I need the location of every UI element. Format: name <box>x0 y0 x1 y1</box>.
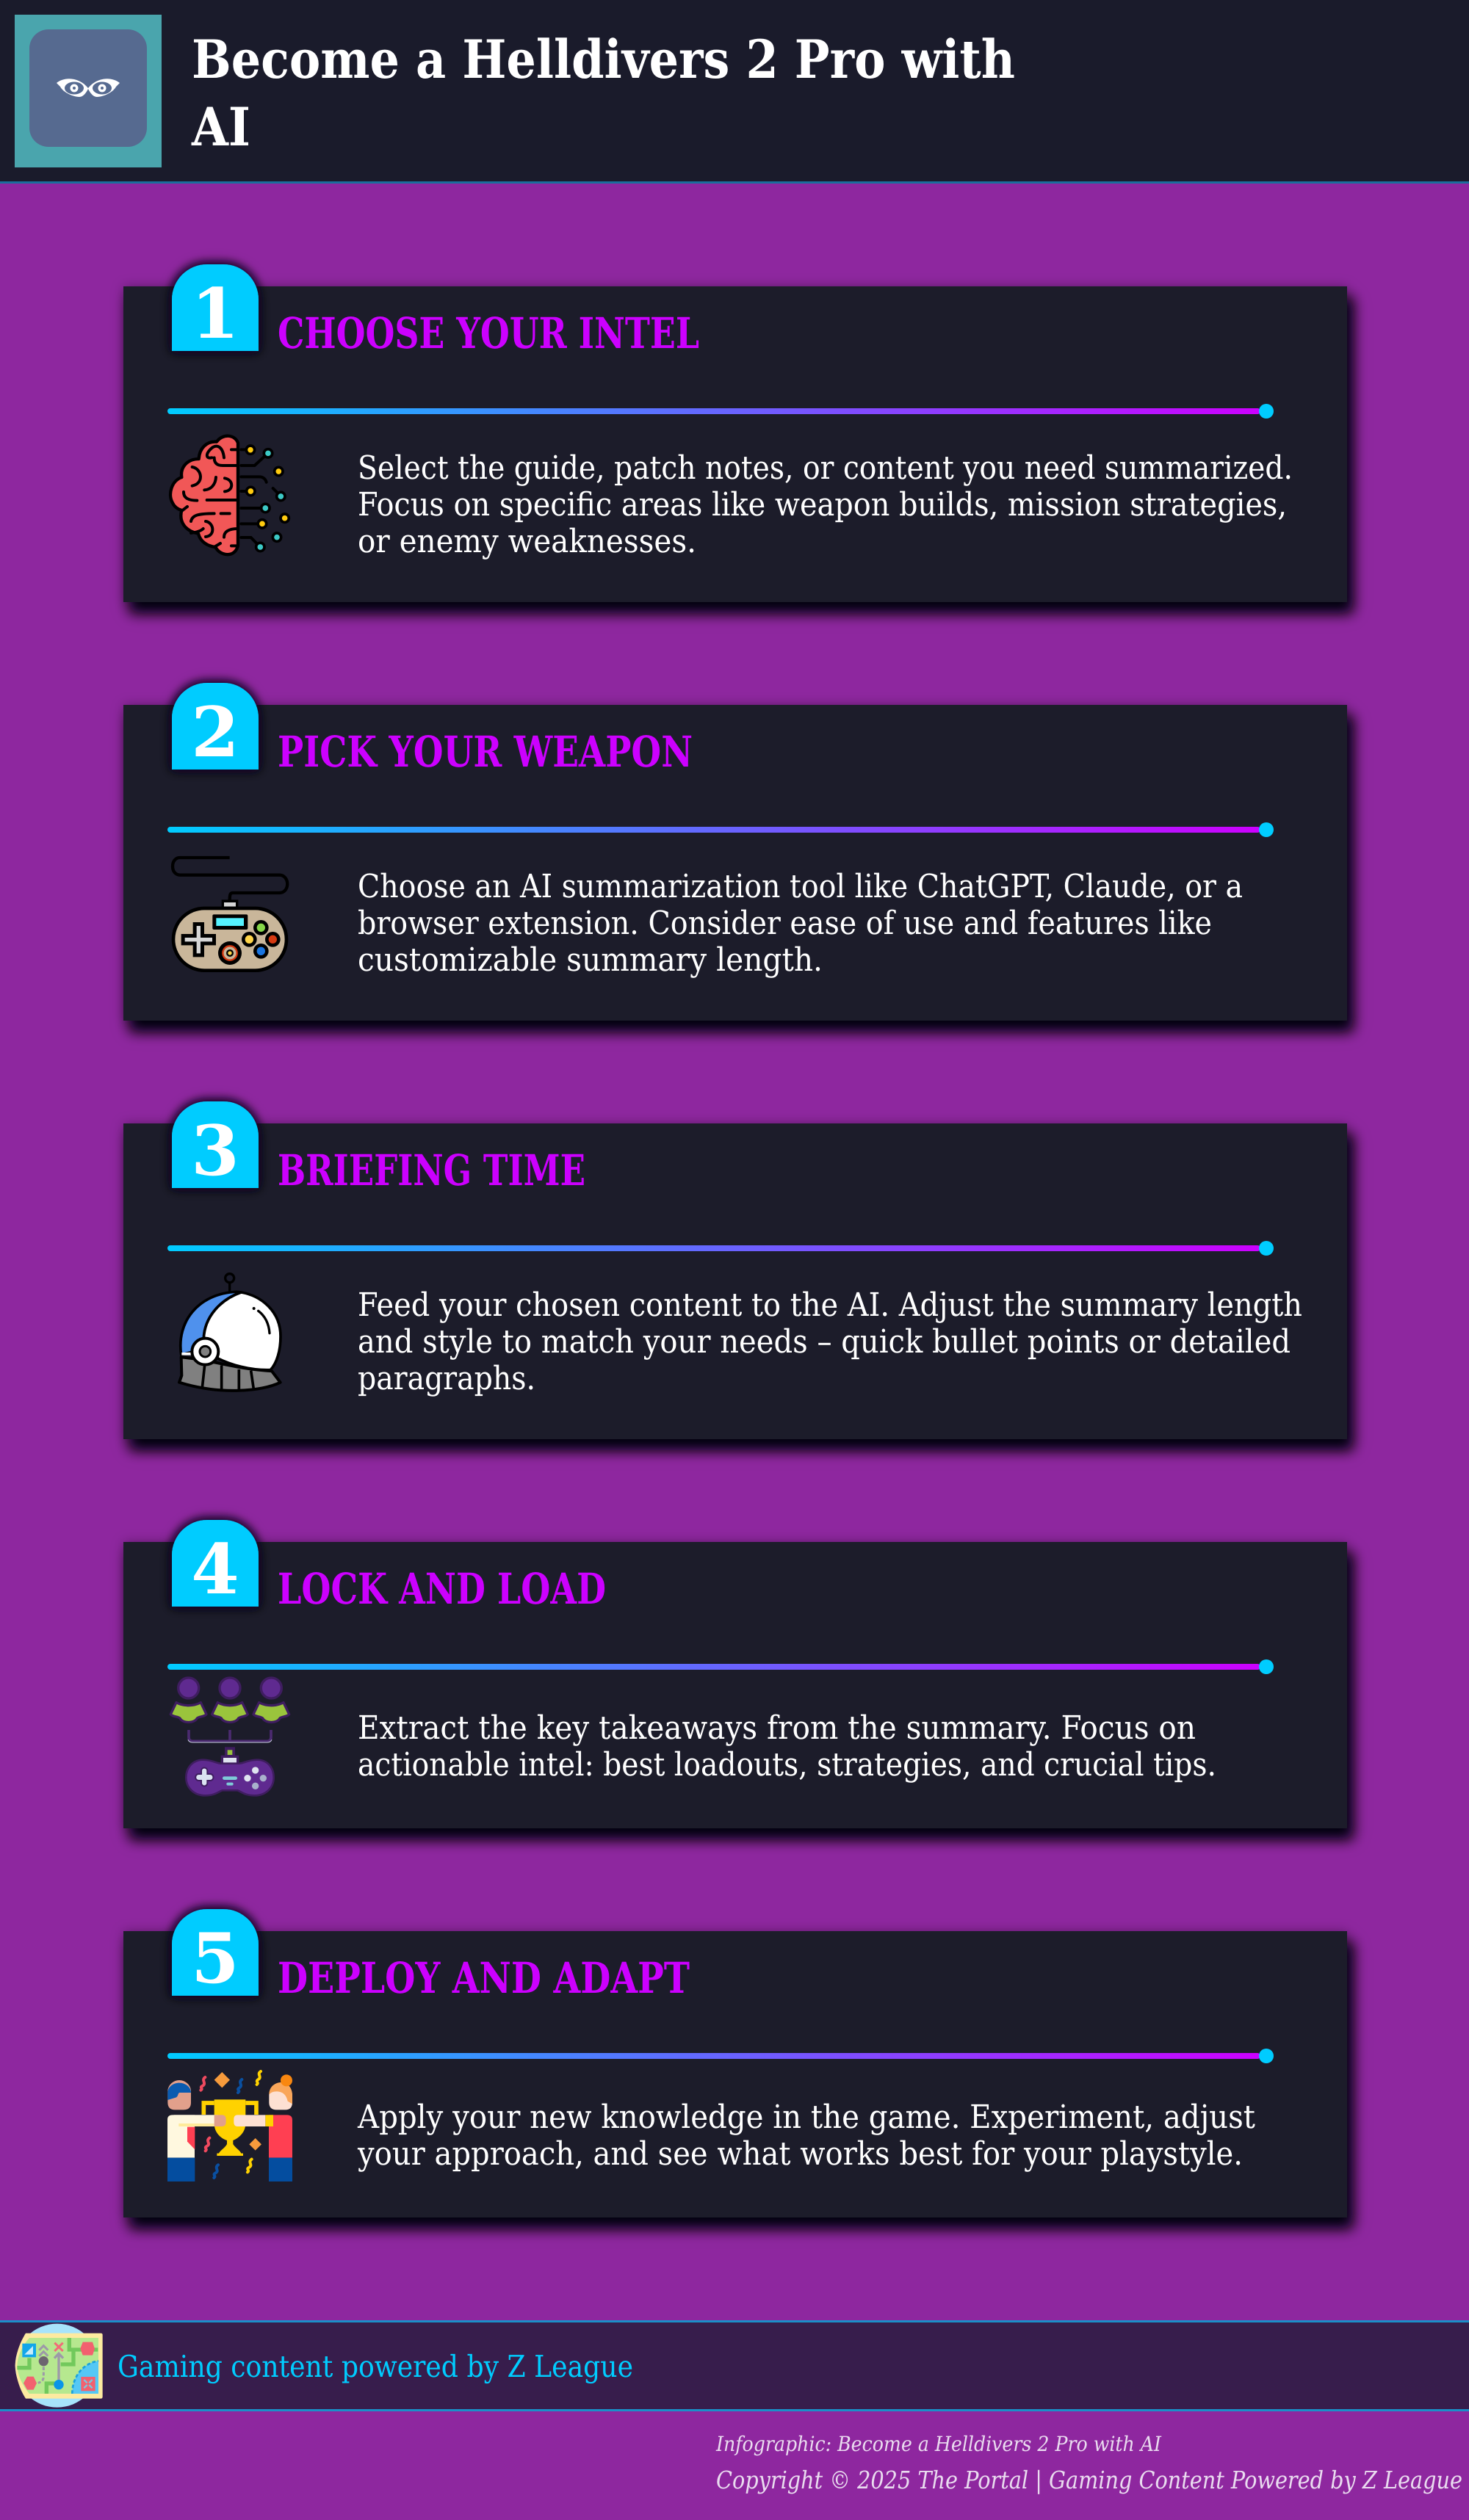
icon: trophy and players <box>167 2071 292 2182</box>
body text: and style to match your needs – quick bullet points or detailed <box>358 1323 1291 1361</box>
panel: step 2 <box>123 683 1347 1021</box>
number badge 4 <box>172 1520 259 1610</box>
heading: PICK YOUR WEAPON <box>278 727 693 777</box>
body text: Focus on specific areas like weapon builds, mission strategies, <box>358 486 1287 524</box>
title: AI <box>191 95 250 158</box>
icon: brain <box>170 436 289 554</box>
divider <box>167 1659 1274 1674</box>
number badge 3 <box>172 1101 259 1192</box>
number badge 2 <box>172 683 259 773</box>
body text: browser extension. Consider ease of use and features like <box>358 905 1212 942</box>
footer band <box>0 2320 1469 2411</box>
number badge 5 <box>172 1909 259 1999</box>
icon: eyes <box>57 79 120 97</box>
body text: customizable summary length. <box>358 941 823 979</box>
body text: paragraphs. <box>358 1360 535 1397</box>
body text: Select the guide, patch notes, or content you need summarized. <box>358 449 1293 487</box>
heading: LOCK AND LOAD <box>278 1564 606 1614</box>
body text: actionable intel: best loadouts, strategies, and crucial tips. <box>358 1746 1216 1784</box>
panel: step 5 <box>123 1909 1347 2217</box>
number badge 5: 5 <box>191 1919 239 1999</box>
divider <box>167 822 1274 837</box>
body text <box>358 868 1243 979</box>
body text: Apply your new knowledge in the game. Experiment, adjust <box>357 2099 1255 2136</box>
body text: your approach, and see what works best for your playstyle. <box>357 2135 1243 2173</box>
body text <box>358 449 1293 560</box>
footer tagline: Gaming content powered by Z League <box>118 2349 633 2384</box>
title: Become a Helldivers 2 Pro with <box>192 28 1015 90</box>
attribution: Infographic: Become a Helldivers 2 Pro with AI <box>715 2432 1162 2456</box>
body text: Choose an AI summarization tool like ChatGPT, Claude, or a <box>358 868 1243 905</box>
divider <box>167 2049 1274 2063</box>
title <box>191 28 1015 158</box>
number badge 4: 4 <box>191 1529 239 1610</box>
panel: step 3 <box>123 1101 1347 1439</box>
number badge 1: 1 <box>191 274 239 355</box>
left player <box>167 2115 195 2158</box>
body text: Feed your chosen content to the AI. Adjust the summary length <box>358 1286 1302 1324</box>
body text <box>357 2099 1255 2173</box>
heading: CHOOSE YOUR INTEL <box>278 308 699 358</box>
logo <box>15 15 162 167</box>
attribution <box>715 2432 1462 2494</box>
number badge 2: 2 <box>191 692 239 773</box>
icon: helmet <box>179 1274 281 1391</box>
body text <box>358 1286 1302 1397</box>
divider <box>167 404 1274 419</box>
right player <box>269 2115 292 2158</box>
heading: BRIEFING TIME <box>278 1145 585 1195</box>
heading: DEPLOY AND ADAPT <box>278 1953 690 2003</box>
header <box>0 0 1469 184</box>
number badge 3: 3 <box>191 1111 239 1192</box>
divider <box>167 1241 1274 1256</box>
panel: step 1 <box>123 264 1347 602</box>
panel: step 4 <box>123 1520 1347 1828</box>
icon: team and gamepad <box>170 1678 289 1795</box>
icon: game controller <box>173 858 287 971</box>
body text <box>358 1709 1216 1784</box>
trophy <box>203 2103 256 2115</box>
body text: Extract the key takeaways from the summary. Focus on <box>358 1709 1196 1747</box>
confetti <box>201 2071 261 2178</box>
body text: or enemy weaknesses. <box>358 523 696 560</box>
number badge 1 <box>172 264 259 355</box>
icon: tactical map <box>15 2324 103 2408</box>
